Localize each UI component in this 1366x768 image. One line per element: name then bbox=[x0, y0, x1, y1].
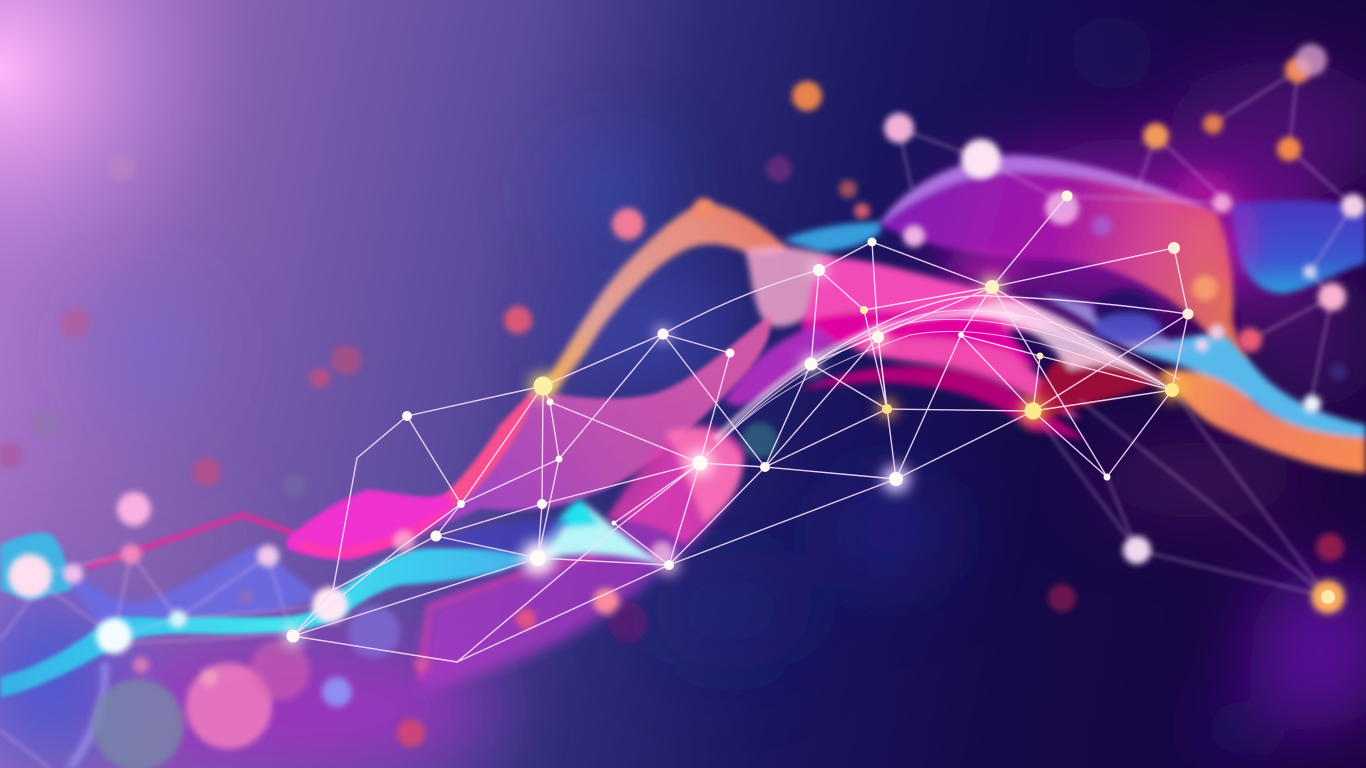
ribbon: pink glow blob bbox=[420, 425, 745, 680]
curved network strands bbox=[706, 310, 1180, 456]
network node glows bbox=[284, 262, 1340, 645]
ribbon: left cyan wave bbox=[0, 533, 535, 697]
ribbon: orange arc bbox=[535, 203, 835, 395]
bright glowing strand band bbox=[715, 310, 1172, 440]
ribbon: lower right blue and orange bands bbox=[960, 295, 1366, 473]
ribbon: violet and coral translucent sheet bbox=[878, 155, 1250, 370]
network lines bbox=[293, 196, 1188, 662]
dark hole in ribbon bbox=[1094, 290, 1162, 342]
ribbon: pink body wave bbox=[400, 315, 771, 538]
magenta glows near violet sheet bbox=[945, 178, 1250, 280]
ribbon: central cyan to white sliver bbox=[430, 500, 668, 567]
ribbon: central magenta wave bbox=[725, 258, 1085, 440]
ribbon: lower purple sheet bbox=[418, 438, 735, 692]
ribbon: right blue wave bbox=[783, 201, 1366, 293]
ribbon: left magenta wave bbox=[87, 490, 452, 567]
network nodes bbox=[286, 190, 1335, 642]
ribbon: left lavender blue band bbox=[60, 547, 317, 768]
